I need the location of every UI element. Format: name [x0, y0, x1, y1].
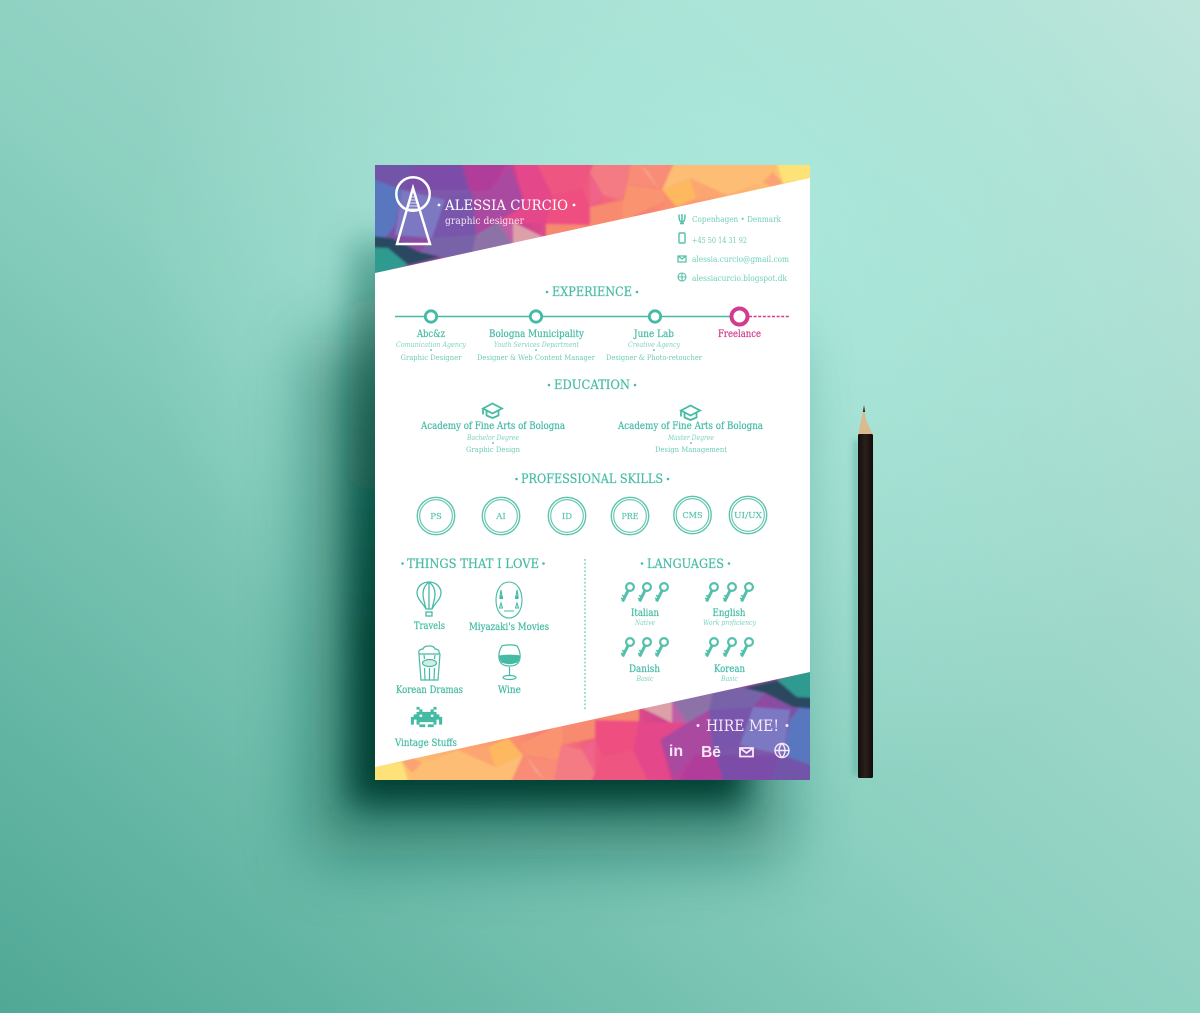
language: danish — [621, 638, 668, 683]
job: Freelance: Freelance — [718, 329, 761, 340]
job: Abc&z: Comunication Agency — [396, 341, 467, 349]
icon: graduation cap — [681, 406, 700, 420]
degree: master: Design Management — [655, 445, 727, 454]
language: korean — [705, 638, 753, 683]
job: June Lab — [606, 329, 702, 362]
icon: no-face mask — [496, 582, 522, 618]
job: Abc&z — [396, 329, 467, 362]
pencil — [853, 405, 873, 778]
job: Bologna Municipality: Bologna Municipality — [489, 329, 584, 340]
header polygon banner — [375, 165, 810, 273]
degree: bachelor — [420, 404, 565, 454]
love: travels: Travels — [414, 621, 445, 632]
job: Abc&z: Abc&z — [416, 329, 445, 340]
language: english — [703, 583, 757, 627]
love: wine — [498, 645, 521, 696]
contact list: alessiacurcio.blogspot.dk — [692, 274, 787, 283]
name: ALESSIA CURCIO — [444, 198, 568, 214]
love: vintage stuffs — [394, 707, 457, 749]
language: danish: Basic — [636, 675, 654, 683]
skill: CMS — [674, 496, 711, 534]
skill: UI/UX: UI/UX — [734, 511, 763, 521]
skill: ID — [548, 497, 586, 535]
language: danish: Danish — [629, 664, 660, 675]
degree: master — [617, 406, 763, 454]
icon: phone — [679, 233, 685, 243]
icon: location — [679, 214, 685, 224]
job: June Lab: Creative Agency — [628, 341, 681, 349]
degree: bachelor: Graphic Design — [466, 445, 520, 454]
love: wine: Wine — [498, 685, 521, 696]
love: movies: Miyazaki's Movies — [469, 622, 549, 633]
language: english: English — [712, 608, 746, 619]
skill: UI/UX — [729, 496, 767, 534]
heading: things that i love: THINGS THAT I LOVE — [407, 557, 539, 572]
contact list: +45 50 14 31 92 — [692, 236, 747, 245]
language: korean: Korean — [714, 664, 745, 675]
job: Bologna Municipality: Designer & Web Content Manager — [477, 353, 595, 362]
icon: keys — [621, 583, 668, 602]
icon: wine glass — [499, 645, 520, 680]
contact list — [678, 214, 789, 283]
icon: globe — [775, 744, 789, 758]
language: italian: Italian — [631, 608, 659, 619]
contact list: alessia.curcio@gmail.com — [692, 255, 789, 264]
heading: education: EDUCATION — [554, 378, 630, 393]
degree: master: Academy of Fine Arts of Bologna — [617, 421, 763, 432]
icon: behance: Bē — [701, 744, 721, 761]
icon: popcorn — [419, 646, 440, 680]
social icons — [669, 743, 789, 761]
heading: hire me: HIRE ME! — [706, 716, 779, 735]
language: english: Work proficiency — [703, 619, 757, 627]
love: travels — [414, 582, 445, 632]
skill: PS — [417, 497, 455, 535]
skill: AI: AI — [495, 512, 506, 522]
skill: ID: ID — [562, 512, 572, 522]
keyhole logo — [396, 177, 430, 244]
heading: experience: EXPERIENCE — [552, 285, 632, 300]
heading: professional skills: PROFESSIONAL SKILLS — [521, 472, 663, 487]
skill: PRE: PRE — [622, 512, 638, 522]
icon: globe — [678, 273, 686, 281]
dotted divider — [584, 559, 586, 710]
degree: bachelor: Academy of Fine Arts of Bologna — [420, 421, 565, 432]
job: Bologna Municipality — [477, 329, 595, 362]
love: korean dramas — [396, 646, 463, 696]
job: June Lab: June Lab — [633, 329, 674, 340]
icon: hot air balloon — [417, 582, 441, 616]
love: vintage stuffs: Vintage Stuffs — [394, 738, 457, 749]
icon: mail — [740, 748, 753, 756]
icon: keys — [621, 638, 668, 656]
love: korean dramas: Korean Dramas — [396, 685, 463, 696]
contact list: Copenhagen • Denmark — [692, 215, 781, 224]
icon: graduation cap — [483, 404, 502, 418]
skill circles — [417, 496, 767, 535]
skill: PS: PS — [430, 512, 442, 522]
resume sheet — [375, 165, 810, 780]
language: korean: Basic — [720, 675, 738, 683]
skill: PRE — [611, 497, 649, 535]
job title: graphic designer — [445, 216, 524, 227]
icon: linkedin: in — [669, 743, 683, 760]
footer polygon banner — [375, 672, 810, 780]
skill: AI — [482, 497, 520, 535]
icon: mail — [678, 256, 686, 262]
icon: keys — [705, 583, 753, 602]
icon: space invader — [411, 707, 442, 727]
skill: CMS: CMS — [682, 511, 703, 521]
icon: keys — [705, 638, 753, 656]
job: Abc&z: Graphic Designer — [400, 353, 462, 362]
degree: master: Master Degree — [667, 434, 714, 442]
language: italian — [621, 583, 668, 627]
job: Bologna Municipality: Youth Services Department — [494, 341, 579, 349]
degree: bachelor: Bachelor Degree — [466, 434, 519, 442]
love: movies — [469, 582, 549, 633]
job: June Lab: Designer & Photo-retoucher — [606, 353, 702, 362]
language: italian: Native — [634, 619, 655, 627]
experience timeline — [395, 308, 790, 324]
heading: languages: LANGUAGES — [647, 557, 724, 572]
